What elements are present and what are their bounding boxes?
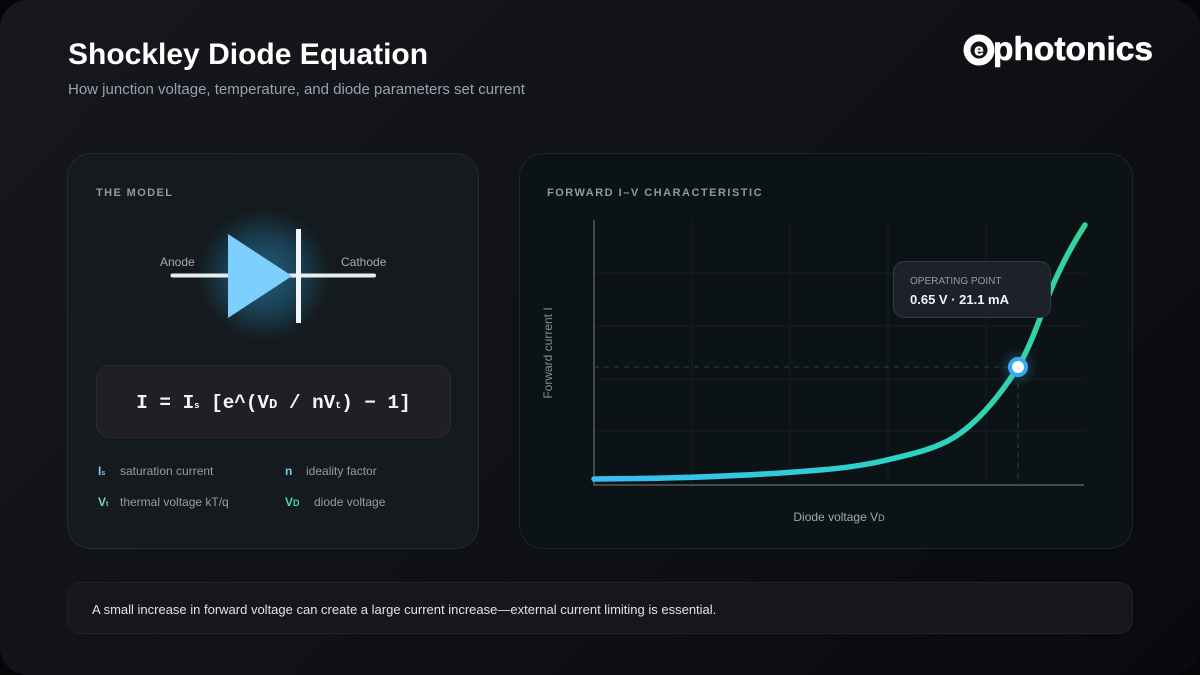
panel: the model (67, 153, 479, 549)
panel heading: FORWARD I–V CHARACTERISTIC (547, 187, 763, 199)
legend: saturation current: saturation current (120, 464, 213, 478)
panel heading: THE MODEL (96, 187, 173, 199)
equation box: I = Is [e^(VD / nVt) − 1] (136, 392, 411, 414)
equation box (96, 365, 451, 438)
logo (964, 31, 1153, 68)
diode symbol (160, 214, 387, 336)
y axis label: Forward current I (541, 307, 555, 399)
panel: forward I-V characteristic (519, 153, 1133, 549)
legend: ideality factor: n (285, 464, 292, 478)
legend: thermal voltage: Vt (98, 495, 108, 509)
legend: diode voltage: diode voltage (314, 495, 385, 509)
I-V curve (594, 225, 1085, 479)
title: Shockley Diode Equation (68, 38, 428, 71)
x axis label: Diode voltage VD (793, 510, 885, 524)
legend: diode voltage: VD (285, 495, 300, 509)
diode symbol: Cathode (341, 255, 387, 269)
legend: thermal voltage: thermal voltage kT/q (120, 495, 229, 509)
operating point marker (998, 347, 1038, 387)
logo wordmark: photonics (993, 31, 1153, 68)
tooltip value: 0.65 V · 21.1 mA (910, 292, 1009, 307)
subtitle: How junction voltage, temperature, and diode parameters set current (68, 81, 525, 98)
callout text: A small increase in forward voltage can create a large current increase—external current limiting is essential. (92, 602, 716, 617)
logo icon (964, 34, 994, 66)
logo icon: e (974, 40, 984, 60)
legend: saturation current: Is (98, 464, 105, 478)
callout bar (67, 582, 1133, 634)
axes (594, 220, 1084, 485)
tooltip label: OPERATING POINT (910, 276, 1002, 287)
operating point guides (594, 367, 1018, 485)
tooltip: operating point (893, 261, 1051, 318)
legend: ideality factor: ideality factor (306, 464, 377, 478)
diode symbol: Anode (160, 255, 195, 269)
